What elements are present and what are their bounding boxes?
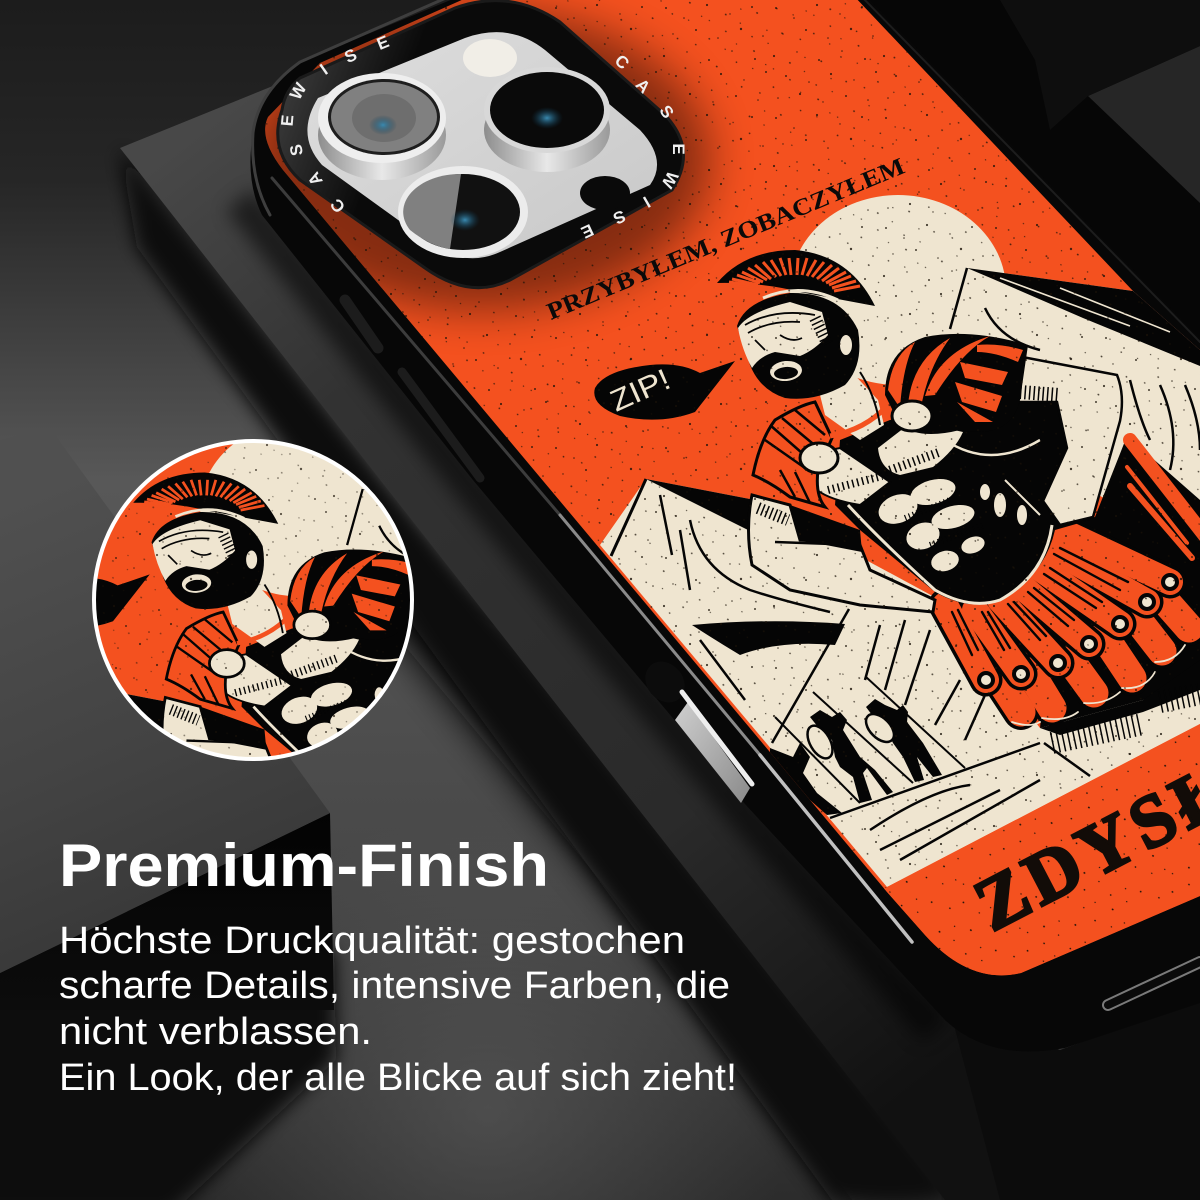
microphone hole [580,176,630,210]
speech bubble text: ZIP! [605,363,675,418]
body text: Höchste Druckqualität: gestochen [59,920,685,962]
shadow under the camera ring [250,10,710,310]
phone side buttons [345,300,752,803]
heading: Premium-Finish [59,832,549,899]
ring lettering right: S [655,102,678,122]
ring lettering right: W [657,168,682,192]
phone charging port [1108,962,1200,1005]
ring lettering right: C [611,51,633,73]
case artwork panel [250,0,1200,990]
legs shadow bar [1040,660,1200,735]
body text: nicht verblassen. [59,1011,372,1053]
lens: main [484,67,610,172]
lens: ultra wide [318,73,446,180]
shoulder clasps [800,401,932,473]
ring lettering left: E [374,32,392,54]
right pauldron [885,334,1028,434]
fine speckle grain texture [266,0,1200,879]
raised arm [1017,356,1122,525]
ring lettering right [578,51,688,242]
camera ring [278,1,683,288]
body text: scharfe Details, intensive Farben, die [59,965,730,1007]
phone case body [250,0,1200,1052]
detail inset circle [92,439,414,761]
hanging left arm [748,495,935,612]
hatching under the skirt [1052,694,1200,743]
left shoulder drape [753,402,832,507]
cape [1040,436,1200,728]
soldiers silhouettes [770,699,942,820]
phone bezel highlights [253,0,1200,942]
ring lettering left: I [316,60,331,79]
band grain texture [889,735,1200,968]
abs [874,474,1027,574]
body text [59,920,737,1099]
cuirass torso [835,395,1120,604]
ring lettering right: E [578,220,596,242]
ring lettering left: W [286,79,311,103]
ring lettering right: S [610,206,628,228]
camera glass plate [307,32,657,258]
ring lettering left: S [286,143,307,157]
ring lettering left [278,32,392,216]
ring lettering left: A [304,169,327,189]
skirt upper straps [945,528,1170,680]
ring lettering right: E [669,143,688,155]
speckle grain texture [250,0,1200,990]
pecs [878,421,963,475]
neck [820,370,884,440]
bottom orange band [884,724,1200,976]
ring lettering left: E [278,114,297,127]
ring lettering left: C [327,195,349,216]
helmet crest [717,250,875,306]
artwork headline: PRZYBYŁEM, ZOBACZYŁEM [543,154,909,326]
skirt lower straps [1000,595,1189,725]
ring lettering right: A [632,75,654,97]
soldiers shields [806,713,893,760]
illustration: roman soldier with mountains [594,195,1200,887]
body text: Ein Look, der alle Blicke auf sich zieht! [59,1057,737,1099]
head and beard [737,293,859,399]
ring lettering right: I [640,192,654,211]
lens: tele [398,166,528,258]
spears [775,677,965,803]
flash [463,39,517,77]
speech bubble shape [594,361,735,420]
ring lettering left: S [342,45,360,67]
